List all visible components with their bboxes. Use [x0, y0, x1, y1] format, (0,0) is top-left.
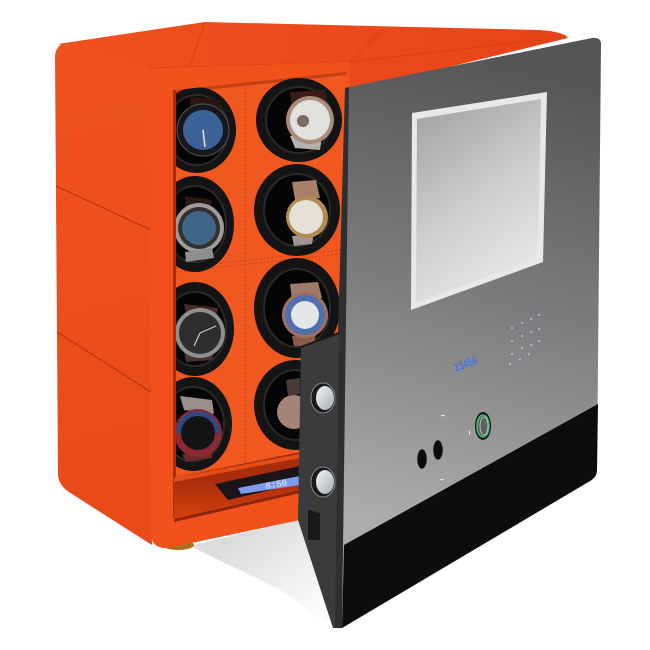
- left column shadow: [173, 90, 176, 518]
- latch slot: [308, 510, 320, 540]
- lcd bezel: [215, 466, 300, 500]
- winder row 4 right: [254, 360, 301, 450]
- black lower band: [342, 404, 598, 628]
- front frame: [150, 62, 350, 548]
- glass door: [342, 38, 601, 628]
- lcd reading: 8:50: [265, 478, 288, 492]
- blue clock readout: 23456: [453, 355, 480, 376]
- winder row 2 right: [254, 164, 340, 256]
- winder row 3 right: [254, 258, 340, 358]
- winder row 1 right: [256, 78, 342, 162]
- lcd screen: [238, 476, 300, 494]
- keyholes: [417, 440, 443, 469]
- keypad dots: [509, 314, 540, 365]
- top seams: [150, 22, 566, 68]
- stitching: [176, 84, 340, 476]
- cabinet top surface: [58, 22, 568, 92]
- door edge strip: [333, 87, 350, 628]
- winder row 4 left: [176, 377, 232, 471]
- ledge lower lip: [174, 490, 300, 522]
- watch winder cabinet illustration: [55, 22, 601, 628]
- winder row 3 left: [176, 282, 234, 376]
- plate face: [298, 332, 339, 628]
- watch winders: [176, 78, 342, 471]
- top inner shadow: [176, 72, 346, 93]
- floor shadow: [190, 520, 334, 628]
- inner compartment: [173, 72, 346, 522]
- winder row 1 left: [176, 87, 236, 173]
- door panel: [342, 38, 601, 628]
- winder row 2 left: [176, 176, 234, 272]
- lcd display: [215, 466, 300, 500]
- lock button upper: [311, 383, 335, 413]
- top shade: [301, 332, 339, 348]
- side seams: [56, 186, 151, 392]
- small indicators: [440, 415, 470, 480]
- cabinet body: [55, 22, 568, 548]
- foot: [162, 540, 194, 550]
- back panel: [176, 74, 346, 480]
- ledge below panels: [174, 452, 300, 519]
- display window: [411, 92, 547, 310]
- lock button lower: [311, 467, 335, 497]
- lock plate: [298, 332, 339, 628]
- ledge edge: [174, 454, 300, 482]
- fingerprint sensor: [475, 412, 491, 440]
- cabinet left side: [55, 44, 152, 545]
